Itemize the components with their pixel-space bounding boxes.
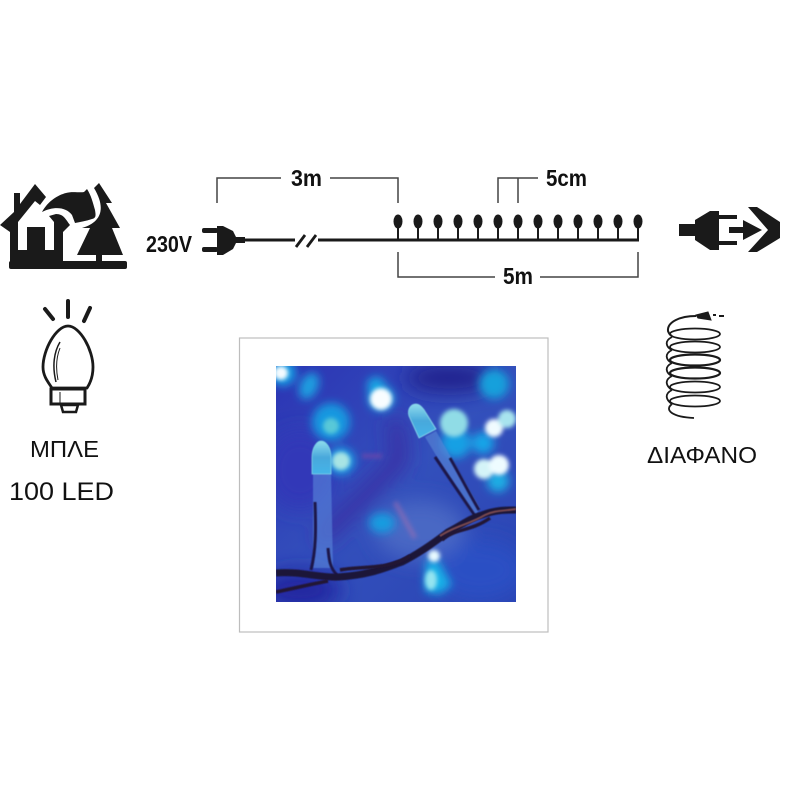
cable with 13 LEDs — [245, 214, 642, 247]
label: 100 LED: 100 LED — [9, 478, 114, 506]
twisted wire — [276, 510, 516, 577]
icon: plug — [202, 226, 245, 255]
dimension: 5m lit length — [398, 252, 638, 289]
dimension: 5m lit length: 5m — [503, 263, 533, 289]
LED leads — [311, 457, 479, 575]
dimension: 5cm spacing: 5cm — [546, 165, 587, 191]
LED head left — [312, 441, 331, 474]
icon: bulb — [43, 301, 93, 412]
icon: house and tree outdoor use — [0, 183, 127, 269]
dimension: 5cm spacing — [498, 165, 587, 203]
label: colour blue: ΜΠΛΕ — [30, 436, 99, 462]
panel: photo frame — [240, 338, 548, 632]
photo: blue LED string lights — [276, 366, 516, 602]
LED stem left — [313, 470, 333, 568]
dimension: 3m lead — [217, 165, 398, 203]
LED head right — [408, 404, 436, 438]
LED stem right — [425, 431, 480, 518]
label: transparent cable: ΔΙΑΦΑΝΟ — [647, 442, 757, 468]
icon: connectable plug — [679, 207, 780, 252]
icon: coiled transparent cable — [667, 312, 724, 418]
label: 230V: 230V — [146, 231, 193, 257]
dimension: 3m lead: 3m — [291, 165, 322, 191]
